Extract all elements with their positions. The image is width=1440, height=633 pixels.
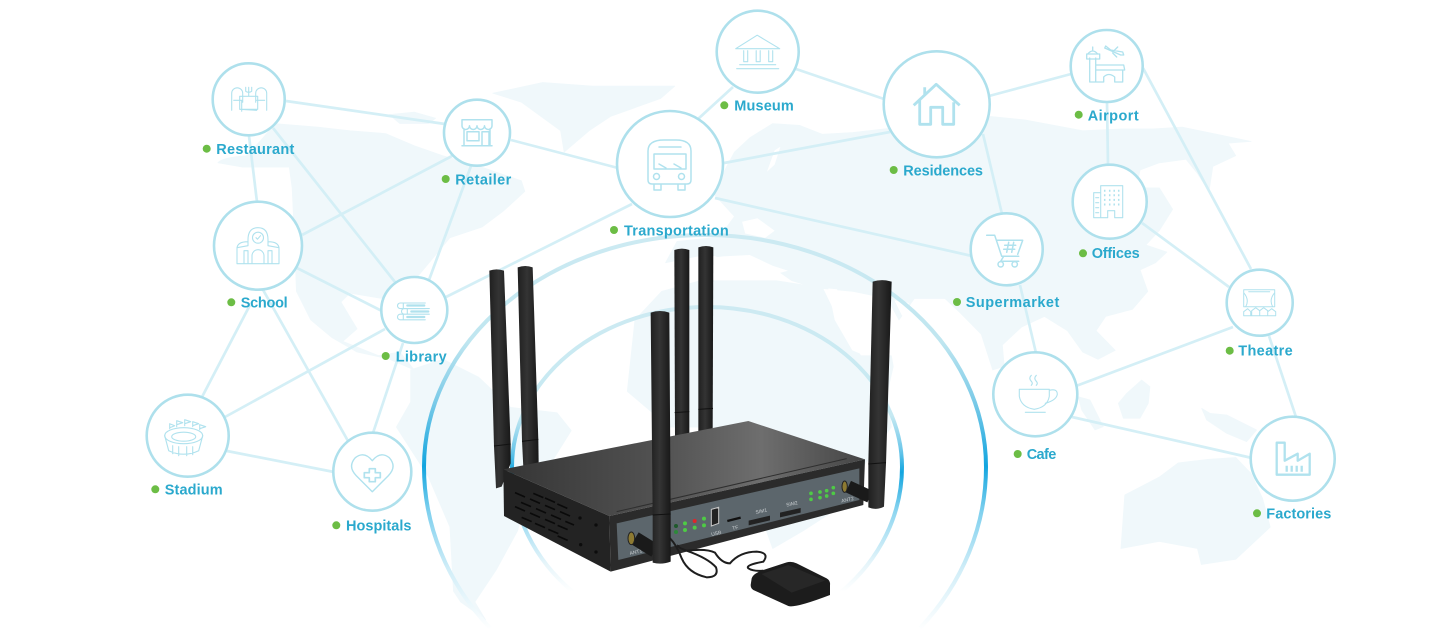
dot and label: Airport: Airport <box>1088 108 1139 124</box>
antenna: right <box>868 280 892 509</box>
USB port <box>711 507 719 526</box>
GPS cable <box>670 538 766 577</box>
world map background <box>218 82 1270 620</box>
panel captions <box>629 496 855 557</box>
dot and label: Factories: Factories <box>1266 506 1331 522</box>
node: Museum <box>717 11 799 115</box>
GPS puck <box>751 562 830 606</box>
node: Offices <box>1073 165 1147 262</box>
icon: coffee cup <box>1019 375 1057 412</box>
antenna: back centre 1 <box>674 249 689 436</box>
panel captions: ANT1 <box>629 548 643 557</box>
map: Arctic islands <box>389 112 436 124</box>
node: Cafe <box>993 352 1077 463</box>
panel captions: ANT2 <box>841 496 855 505</box>
node: Restaurant <box>203 63 294 158</box>
dot and label: Offices: Offices <box>1092 246 1140 262</box>
dot and label: Transportation: Transportation <box>624 223 729 239</box>
node: Transportation <box>610 111 729 239</box>
antenna: front <box>651 311 671 564</box>
node: Library <box>381 277 447 365</box>
antenna: back left 2 <box>518 266 539 467</box>
router side face <box>503 469 611 572</box>
side vents <box>515 493 574 540</box>
node: Stadium <box>147 395 229 499</box>
map: New Guinea <box>1202 408 1257 442</box>
icon: school building <box>237 228 279 264</box>
map: Sumatra <box>1078 397 1103 430</box>
node: Retailer <box>442 100 512 188</box>
inner signal ring <box>512 307 902 592</box>
panel captions: SIM1 <box>755 507 768 516</box>
router front face <box>609 459 865 572</box>
panel captions: USB <box>711 530 723 538</box>
antenna: back left 1 <box>489 269 511 488</box>
antenna: back centre 2 <box>698 246 713 433</box>
top edge seam <box>617 459 847 512</box>
dot and label: Cafe: Cafe <box>1027 447 1056 463</box>
icon: stage and seats <box>1244 290 1276 316</box>
icon: shop <box>462 120 492 146</box>
map: Greenland <box>493 82 675 152</box>
antenna connector left <box>635 538 655 551</box>
status LEDs <box>674 486 835 534</box>
icon: museum building <box>736 35 780 69</box>
router top face <box>503 421 865 516</box>
icon: office buildings <box>1094 186 1123 218</box>
dot and label: Retailer: Retailer <box>455 172 512 188</box>
map: North America <box>218 124 525 370</box>
node: Residences <box>884 51 990 179</box>
outer signal ring <box>424 235 986 628</box>
node: Supermarket <box>953 213 1059 311</box>
icon: heart with cross <box>352 455 393 492</box>
dot and label: Restaurant: Restaurant <box>216 142 294 158</box>
TF card slot <box>727 518 741 521</box>
dot and label: Library: Library <box>396 349 447 365</box>
dot and label: Residences: Residences <box>903 163 983 179</box>
panel captions: SIM2 <box>786 500 799 509</box>
router device <box>489 246 892 606</box>
dot and label: Museum: Museum <box>734 99 794 115</box>
map: Madagascar <box>1118 380 1150 418</box>
antenna connector right <box>848 487 870 497</box>
map: South America <box>396 359 571 620</box>
icon: stadium with flags <box>165 420 206 456</box>
node: Theatre <box>1226 270 1293 360</box>
connection network lines <box>202 68 1296 472</box>
dot and label: Hospitals: Hospitals <box>346 518 412 534</box>
icon: table and chairs <box>232 87 267 111</box>
SIM slots <box>749 508 801 525</box>
icon: control tower and plane <box>1087 46 1125 82</box>
node: School <box>214 202 302 311</box>
gold connector left <box>628 532 635 545</box>
gold connector right <box>842 481 847 492</box>
map: Eurasia <box>666 116 1251 370</box>
dot and label: Theatre: Theatre <box>1238 344 1293 360</box>
map: Australia <box>1121 457 1270 565</box>
front panel <box>617 468 859 560</box>
node: Hospitals <box>332 433 412 534</box>
icon: house <box>914 84 960 124</box>
icon: stack of books <box>398 303 429 320</box>
node: Factories <box>1251 417 1335 522</box>
icon: bus <box>648 140 691 190</box>
dot and label: Stadium: Stadium <box>165 483 223 499</box>
map: inland seas <box>689 147 911 354</box>
icon: shopping cart <box>987 235 1023 267</box>
icon: factory <box>1277 443 1310 475</box>
node: Airport <box>1071 30 1143 124</box>
map: Africa <box>627 281 893 549</box>
dot and label: School: School <box>241 295 288 311</box>
side screws <box>578 516 598 554</box>
panel captions: TF <box>732 525 739 532</box>
dot and label: Supermarket: Supermarket <box>966 295 1059 311</box>
